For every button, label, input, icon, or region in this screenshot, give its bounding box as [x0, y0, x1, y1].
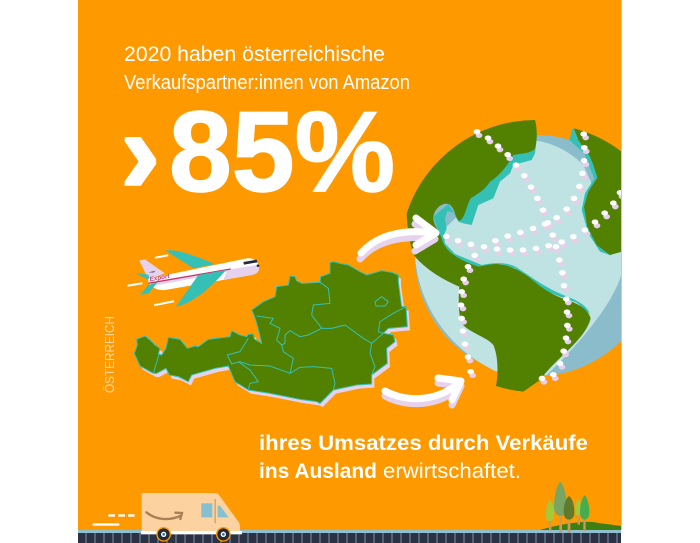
tail fin and upper wing: [139, 259, 165, 279]
globe ocean shadow: [415, 135, 621, 376]
closing text: ihres Umsatzes durch Verkäufe: [259, 432, 588, 455]
flight routes: [443, 129, 623, 381]
closing text: [259, 432, 588, 483]
heading text: [124, 43, 410, 94]
teal coastline east: [569, 128, 613, 255]
country label: ÖSTERREICH: [103, 316, 117, 393]
lower wing and tailplane: [176, 270, 226, 307]
cockpit: [243, 260, 257, 265]
export label: Export: [149, 273, 171, 283]
tall tree: [554, 482, 567, 516]
teal coastline: [433, 130, 590, 314]
light tree: [546, 500, 554, 521]
truck body: [142, 493, 240, 532]
heading text: 2020 haben österreichische: [124, 43, 385, 66]
closing text: ins Ausland: [259, 460, 377, 483]
fuselage: [148, 258, 259, 290]
smile logo: [146, 512, 182, 519]
map shadow: [137, 265, 410, 407]
closing text: erwirtschaftet.: [383, 460, 521, 483]
road: [78, 530, 621, 543]
green tree: [580, 495, 589, 520]
map land: [134, 262, 407, 403]
arrow to globe, upper: [360, 218, 436, 259]
state borders: [153, 282, 406, 390]
flight routes shadow: [445, 133, 625, 385]
tree trunks: [549, 513, 586, 533]
arrow to globe, lower: [385, 378, 461, 405]
big statistic: ›: [121, 87, 160, 217]
front wheel: [156, 527, 171, 542]
truck sill: [141, 531, 242, 534]
tail marking: [148, 271, 156, 273]
continent: americas: [407, 120, 591, 392]
trees on hill: [540, 482, 621, 533]
infographic canvas: [78, 0, 622, 543]
lime tree: [575, 499, 581, 515]
map of Austria: [134, 262, 410, 407]
rear wheel: [216, 527, 231, 542]
heading text: Verkaufspartner:innen von Amazon: [124, 71, 410, 94]
dark tree: [564, 496, 574, 520]
continent: east: [574, 128, 622, 255]
big statistic: 85%: [169, 89, 395, 216]
windows: [201, 503, 212, 517]
airplane: [128, 250, 259, 307]
globe: [406, 120, 621, 392]
globe ocean: [415, 141, 622, 375]
delivery truck: [93, 493, 242, 542]
speed lines: [128, 255, 173, 305]
hill: [540, 522, 621, 530]
orange background panel: [78, 0, 621, 543]
speed lines: [93, 514, 135, 526]
